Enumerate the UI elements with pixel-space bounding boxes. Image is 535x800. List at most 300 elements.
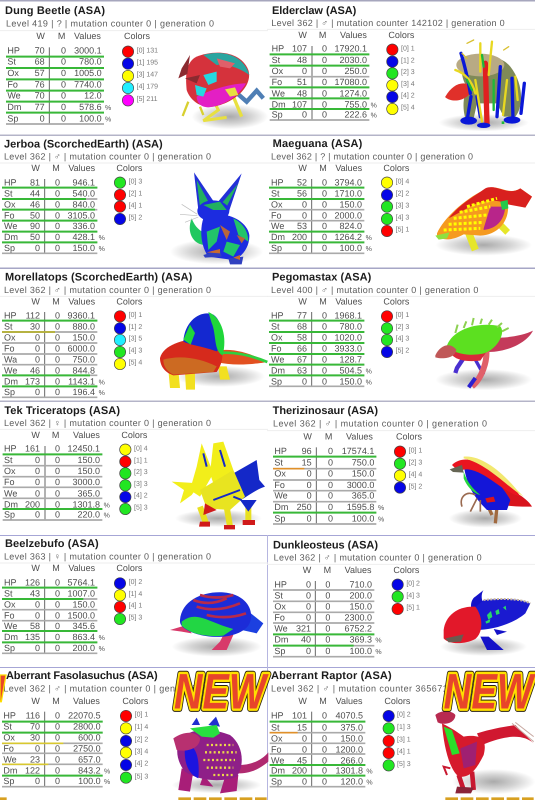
stat table: Values bbox=[346, 431, 373, 441]
stat table: 70 bbox=[35, 45, 45, 55]
stat table: 780.0 bbox=[79, 57, 102, 67]
stat table: 43 bbox=[30, 588, 40, 598]
stat table: Dm bbox=[271, 766, 285, 776]
stat table: 843.2 bbox=[78, 765, 101, 775]
stat table: Fo bbox=[274, 480, 285, 490]
stat table: 150.0 bbox=[340, 733, 363, 743]
colors legend: [4] 3 bbox=[129, 347, 142, 354]
stat table: Fo bbox=[4, 344, 15, 354]
stat table: 0 bbox=[302, 210, 307, 220]
stat table: 3000.0 bbox=[72, 477, 100, 487]
stat table: 0 bbox=[55, 365, 60, 375]
stat table: 0 bbox=[35, 333, 40, 343]
stat table: 0 bbox=[306, 602, 311, 612]
stat table: % bbox=[366, 367, 372, 375]
colors legend: [0] 2 bbox=[406, 579, 420, 587]
stat table: 0 bbox=[328, 480, 333, 490]
stat table: 0 bbox=[325, 613, 330, 623]
colors legend: [5] 211 bbox=[137, 95, 158, 103]
stat table: St bbox=[271, 188, 280, 198]
title: Beelzebufo (ASA) bbox=[5, 537, 99, 549]
stat table: Sp bbox=[4, 510, 15, 520]
colors legend: Colors bbox=[383, 163, 409, 173]
stat table: 0 bbox=[55, 177, 60, 187]
stat table: Ox bbox=[4, 599, 16, 609]
stat table: 3933.0 bbox=[334, 344, 362, 354]
stat table: 90 bbox=[30, 221, 40, 231]
stat table: 51 bbox=[297, 77, 307, 87]
stat table: 0 bbox=[55, 776, 60, 786]
subtitle: Level 362 | ♂ | mutation counter 0 | generation 0 bbox=[274, 553, 482, 563]
stat table: M bbox=[324, 565, 331, 575]
stat table: 0 bbox=[322, 199, 327, 209]
stat table: 0 bbox=[55, 243, 60, 253]
stat table: Sp bbox=[272, 110, 283, 120]
stat table: 0 bbox=[322, 99, 327, 109]
stat table: Ox bbox=[4, 199, 16, 209]
stat table: 0 bbox=[325, 591, 330, 601]
stat table: 0 bbox=[322, 88, 327, 98]
stat table: 844.8 bbox=[72, 365, 95, 375]
colors legend: [5] 3 bbox=[397, 760, 411, 768]
stat table: 0 bbox=[55, 588, 60, 598]
stat table: 120.0 bbox=[340, 776, 363, 786]
colors legend: [1] 3 bbox=[397, 723, 411, 731]
stat table: 81 bbox=[30, 177, 40, 187]
stat table: 0 bbox=[322, 744, 327, 754]
stat table: Dm bbox=[7, 102, 21, 112]
stat table bbox=[0, 563, 268, 653]
stat table: 77 bbox=[35, 102, 45, 112]
stat table: 76 bbox=[35, 79, 45, 89]
stat table: Fo bbox=[4, 610, 15, 620]
stat table: W bbox=[298, 163, 307, 173]
stat table: 824.0 bbox=[339, 221, 362, 231]
stat table: 200.0 bbox=[349, 591, 372, 601]
stat table: 17080.0 bbox=[334, 77, 367, 87]
stat table: Sp bbox=[271, 243, 282, 253]
stat table: 0 bbox=[35, 744, 40, 754]
creature: elderclaw bbox=[439, 40, 529, 131]
colors legend bbox=[114, 296, 142, 370]
title: Jerboa (ScorchedEarth) (ASA) bbox=[4, 137, 163, 150]
stat table: 0 bbox=[322, 376, 327, 386]
stat table: 5764.1 bbox=[67, 577, 95, 587]
stat table: 0 bbox=[322, 210, 327, 220]
stat table: W bbox=[36, 31, 45, 41]
stat table: 50 bbox=[30, 232, 40, 242]
subtitle: Level 363 | ♀ | mutation counter 0 | generation 0 bbox=[4, 551, 211, 561]
panel: Dung Beetle bbox=[0, 4, 268, 129]
stat table: 1143.1 bbox=[68, 376, 95, 386]
stat table: 0 bbox=[322, 44, 327, 54]
stat table: 336.0 bbox=[72, 221, 95, 231]
stat table: 22070.5 bbox=[68, 711, 101, 721]
stat table: 200.0 bbox=[72, 643, 95, 653]
stat table: 70 bbox=[30, 722, 40, 732]
stat table: 0 bbox=[55, 387, 60, 397]
stat table: 150.0 bbox=[72, 599, 95, 609]
creature: therizinosaur bbox=[449, 457, 532, 528]
stat table: 0 bbox=[306, 591, 311, 601]
stat table: 122 bbox=[25, 765, 40, 775]
stat table: We bbox=[271, 755, 284, 765]
stat table: M bbox=[319, 696, 327, 706]
stat table: % bbox=[99, 245, 105, 253]
title: Dung Beetle (ASA) bbox=[5, 4, 105, 16]
stat table: 0 bbox=[55, 210, 60, 220]
stat table: 15 bbox=[297, 722, 307, 732]
stat table: 0 bbox=[35, 488, 40, 498]
stat table: 0 bbox=[306, 646, 311, 656]
stat table: 0 bbox=[55, 599, 60, 609]
title: Aberrant Fasolasuchus (ASA) bbox=[6, 669, 158, 681]
stat table: 150.0 bbox=[349, 602, 372, 612]
stat table: Values bbox=[345, 565, 372, 575]
stat table: Sp bbox=[271, 776, 282, 786]
creature: tek triceratops bbox=[172, 442, 265, 529]
panel: Dunkleosteus bbox=[267, 538, 535, 657]
stat table: 4070.5 bbox=[335, 711, 363, 721]
stat table: Fo bbox=[274, 613, 285, 623]
stat table: 30 bbox=[30, 322, 40, 332]
stat table: 0 bbox=[35, 455, 40, 465]
subtitle: Level 400 | ♂ | mutation counter 0 | generation 0 bbox=[271, 285, 478, 295]
stat table: Dm bbox=[272, 99, 286, 109]
panel: Beelzebufo bbox=[0, 537, 268, 657]
stat table: 135 bbox=[25, 632, 40, 642]
colors legend: [4] 2 bbox=[134, 492, 148, 499]
colors legend: Colors bbox=[116, 563, 142, 573]
stat table: 0 bbox=[307, 480, 312, 490]
stat table: 3000.0 bbox=[347, 480, 374, 490]
colors legend: [2] 3 bbox=[409, 458, 422, 466]
stat table: 250 bbox=[297, 502, 312, 512]
stat table: % bbox=[375, 637, 382, 644]
stat table: We bbox=[272, 88, 285, 98]
stat table: 710.0 bbox=[349, 580, 372, 590]
stat table bbox=[267, 163, 535, 253]
stat table: 0 bbox=[55, 621, 60, 631]
stat table: 1301.8 bbox=[72, 499, 100, 509]
stat table: W bbox=[298, 297, 307, 307]
creature: dunkleosteus bbox=[440, 590, 530, 656]
stat table bbox=[267, 431, 535, 524]
stat table: 0 bbox=[322, 55, 327, 65]
stat table: 0 bbox=[55, 510, 60, 520]
colors legend: [5] 1 bbox=[406, 604, 420, 611]
stat table: 840.0 bbox=[72, 199, 95, 209]
colors legend bbox=[394, 431, 422, 493]
stat table: 1274.0 bbox=[339, 88, 367, 98]
stat table: Ox bbox=[3, 733, 15, 743]
stat table: 750.0 bbox=[72, 355, 95, 365]
stat table: 0 bbox=[325, 602, 330, 612]
colors legend: [4] 3 bbox=[406, 591, 420, 599]
stat table: % bbox=[99, 634, 105, 642]
colors legend bbox=[387, 30, 415, 115]
stat table: 250.0 bbox=[344, 66, 367, 76]
stat table: We bbox=[271, 221, 284, 231]
colors legend bbox=[114, 163, 142, 225]
colors legend: [3] 4 bbox=[401, 80, 415, 88]
colors legend: [1] 4 bbox=[129, 590, 142, 598]
stat table: We bbox=[271, 355, 284, 365]
stat table: 46 bbox=[30, 365, 40, 375]
colors legend: [5] 2 bbox=[396, 347, 409, 354]
stat table: 0 bbox=[61, 102, 66, 112]
stat table: % bbox=[99, 378, 105, 386]
stat table: 100.0 bbox=[349, 646, 372, 656]
stat table: M bbox=[52, 563, 60, 573]
stat table: St bbox=[4, 188, 13, 198]
stat table: Fo bbox=[7, 79, 18, 89]
stat table: Dm bbox=[4, 376, 18, 386]
subtitle: Level 362 | ? | mutation counter 0 | generation 0 bbox=[271, 151, 473, 161]
subtitle: Level 362 | ♂ | mutation counter 0 | generation 0 bbox=[4, 285, 211, 295]
colors legend: [3] 3 bbox=[134, 480, 148, 488]
panel: Aberrant Raptor bbox=[270, 663, 535, 799]
stat table: Ox bbox=[4, 466, 16, 476]
stat table: 0 bbox=[322, 755, 327, 765]
stat table: HP bbox=[274, 580, 287, 590]
colors legend: [1] 195 bbox=[137, 58, 158, 66]
stat table: % bbox=[378, 515, 384, 523]
stat table: St bbox=[4, 455, 13, 465]
stat table: 0 bbox=[40, 113, 45, 123]
colors legend: [2] 2 bbox=[135, 736, 148, 743]
stat table: 750.0 bbox=[352, 457, 374, 467]
subtitle: Level 362 | ♂ | mutation counter 365671 bbox=[271, 684, 448, 694]
colors legend: [5] 2 bbox=[409, 482, 422, 490]
stat table: 1301.8 bbox=[335, 766, 363, 776]
stat table: 0 bbox=[55, 722, 60, 732]
stat table: Fo bbox=[272, 77, 282, 87]
colors legend: [5] 2 bbox=[129, 214, 142, 221]
stat table: Ox bbox=[272, 66, 283, 76]
stat table: 0 bbox=[325, 580, 330, 590]
stat table: Dm bbox=[271, 365, 285, 375]
colors legend: [4] 3 bbox=[396, 214, 409, 221]
stat table: 48 bbox=[297, 88, 307, 98]
stat table: 0 bbox=[325, 624, 330, 634]
stat table: M bbox=[319, 163, 327, 173]
subtitle: Level 362 | ♂ | mutation counter 0 | generation 0 bbox=[273, 419, 487, 429]
stat table: 2300.0 bbox=[344, 613, 372, 623]
stat table: Ox bbox=[4, 333, 16, 343]
stat table: 0 bbox=[61, 68, 66, 78]
creature: beelzebufo bbox=[170, 592, 263, 657]
stat table: Dm bbox=[271, 232, 285, 242]
stat table: 0 bbox=[307, 491, 312, 501]
stat table: 0 bbox=[328, 513, 333, 523]
stat table: 0 bbox=[35, 599, 40, 609]
stat table: We bbox=[274, 491, 288, 501]
stat table: 0 bbox=[55, 455, 60, 465]
stat table: Ox bbox=[271, 199, 283, 209]
stat table: HP bbox=[271, 711, 284, 721]
badge: NEW: NEW bbox=[174, 663, 269, 719]
stat table: 0 bbox=[35, 510, 40, 520]
stat table: 7740.0 bbox=[74, 79, 102, 89]
stat table: 504.5 bbox=[339, 365, 362, 375]
stat table: St bbox=[271, 722, 280, 732]
stat table: 0 bbox=[55, 477, 60, 487]
stat table: HP bbox=[3, 711, 16, 721]
stat table bbox=[0, 163, 268, 253]
colors legend: [0] 1 bbox=[409, 446, 422, 454]
subtitle: Level 362 | ♀ | mutation counter 0 | generation 0 bbox=[4, 418, 211, 428]
creature: aberrant raptor bbox=[435, 711, 535, 794]
stat table: 100.0 bbox=[352, 513, 374, 523]
stat table: Ox bbox=[274, 602, 286, 612]
stat table: 755.0 bbox=[344, 99, 367, 109]
stat table: 48 bbox=[297, 55, 307, 65]
stat table: 1968.1 bbox=[334, 311, 362, 321]
stat table: 0 bbox=[322, 322, 327, 332]
colors legend: Colors bbox=[121, 430, 147, 440]
stat table: % bbox=[366, 378, 372, 386]
stat table bbox=[267, 564, 535, 657]
stat table: We bbox=[4, 621, 17, 631]
stat table: 107 bbox=[292, 44, 307, 54]
stat table: 0 bbox=[302, 66, 307, 76]
stat table: Fo bbox=[271, 744, 282, 754]
stat table: % bbox=[366, 768, 373, 775]
stat table: 0 bbox=[302, 744, 307, 754]
stat table: 0 bbox=[55, 188, 60, 198]
stat table: 161 bbox=[25, 444, 40, 454]
stat table: 0 bbox=[55, 643, 60, 653]
stat table: Sp bbox=[7, 113, 18, 123]
stat table: 126 bbox=[25, 577, 40, 587]
panel: Pegomastax bbox=[267, 271, 535, 390]
panel: Aberrant Fasolasuchus bbox=[0, 663, 269, 799]
stat table: % bbox=[104, 767, 110, 775]
stat table: 200 bbox=[25, 499, 40, 509]
colors legend: [3] 4 bbox=[135, 747, 148, 755]
colors legend: [4] 1 bbox=[397, 748, 411, 755]
stat table: Fo bbox=[271, 210, 282, 220]
stat table: 345.6 bbox=[72, 621, 95, 631]
stat table: 70 bbox=[35, 91, 45, 101]
stat table bbox=[0, 429, 268, 520]
stat table: HP bbox=[4, 177, 17, 187]
stat table: % bbox=[105, 115, 111, 123]
colors legend: [5] 3 bbox=[134, 504, 148, 511]
stat table: 0 bbox=[35, 610, 40, 620]
stat table: 45 bbox=[297, 755, 307, 765]
stat table: Dm bbox=[274, 502, 288, 512]
stat table: We bbox=[7, 91, 21, 101]
stat table: 0 bbox=[322, 333, 327, 343]
stat table: % bbox=[366, 234, 372, 242]
stat table: % bbox=[99, 389, 105, 397]
stat table: We bbox=[4, 365, 17, 375]
colors legend: [2] 3 bbox=[134, 468, 148, 476]
colors legend: [4] 2 bbox=[135, 760, 148, 767]
stat table: % bbox=[105, 104, 111, 112]
subtitle: Level 362 | ♂ | mutation counter 0 | generation 0 bbox=[3, 684, 213, 694]
panel: Morellatops bbox=[0, 271, 268, 397]
stat table: 369.3 bbox=[349, 635, 372, 645]
stat table: 2750.0 bbox=[73, 744, 101, 754]
stat table: % bbox=[371, 112, 377, 119]
stat table: 23 bbox=[30, 755, 40, 765]
stat table: Sp bbox=[4, 243, 15, 253]
stat table: W bbox=[303, 431, 312, 441]
stat table: 780.0 bbox=[339, 322, 362, 332]
stat table: Values bbox=[335, 163, 362, 173]
stat table: 3794.0 bbox=[334, 177, 362, 187]
stat table: Dm bbox=[4, 232, 18, 242]
panel: Jerboa bbox=[0, 137, 268, 264]
colors legend: [5] 4 bbox=[129, 359, 142, 366]
stat table: M bbox=[52, 430, 59, 440]
stat table: 0 bbox=[55, 488, 60, 498]
stat table: 30 bbox=[30, 733, 40, 743]
colors legend bbox=[383, 696, 411, 771]
stat table: % bbox=[99, 645, 105, 653]
colors legend: [5] 4 bbox=[401, 104, 415, 111]
colors legend: [0] 4 bbox=[134, 444, 148, 452]
stat table: Fo bbox=[271, 344, 282, 354]
stat table: 150.0 bbox=[339, 199, 362, 209]
stat table: 0 bbox=[55, 577, 60, 587]
colors legend: Colors bbox=[393, 565, 419, 575]
stat table: 52 bbox=[297, 177, 307, 187]
stat table: Values bbox=[335, 297, 362, 307]
stat table: 0 bbox=[328, 457, 333, 467]
creature: morellatops bbox=[160, 312, 267, 390]
colors legend: [3] 147 bbox=[137, 71, 158, 78]
subtitle: Level 362 | ♂ | mutation counter 142102 | generation 0 bbox=[271, 18, 505, 28]
colors legend: [0] 1 bbox=[129, 311, 142, 319]
colors legend bbox=[114, 563, 142, 625]
title: Dunkleosteus (ASA) bbox=[273, 538, 378, 551]
stat table: 946.1 bbox=[72, 177, 95, 187]
stat table: 0 bbox=[61, 79, 66, 89]
colors legend: [1] 1 bbox=[134, 456, 148, 464]
stat table: 196.4 bbox=[72, 387, 95, 397]
stat table: 0 bbox=[302, 733, 307, 743]
stat table: 150.0 bbox=[72, 333, 95, 343]
stat table: 0 bbox=[302, 376, 307, 386]
colors legend: [4] 1 bbox=[129, 602, 142, 609]
stat table: 0 bbox=[322, 733, 327, 743]
stat table: Values bbox=[340, 30, 367, 40]
title: Tek Triceratops (ASA) bbox=[4, 404, 120, 416]
stat table: 0 bbox=[35, 387, 40, 397]
stat table: % bbox=[371, 101, 377, 109]
stat table: 0 bbox=[55, 221, 60, 231]
stat table: 150.0 bbox=[77, 455, 100, 465]
stat table: 0 bbox=[302, 199, 307, 209]
stat table: % bbox=[104, 501, 110, 509]
stat table: M bbox=[52, 163, 60, 173]
title: Therizinosaur (ASA) bbox=[273, 404, 378, 416]
stat table: 0 bbox=[55, 733, 60, 743]
stat table: 0 bbox=[55, 199, 60, 209]
stat table: % bbox=[366, 778, 373, 786]
stat table: 100.0 bbox=[339, 243, 362, 253]
stat table: Dm bbox=[274, 635, 288, 645]
stat table: 0 bbox=[322, 177, 327, 187]
stat table: 0 bbox=[325, 646, 330, 656]
stat table: 657.0 bbox=[78, 755, 101, 765]
stat table: Values bbox=[68, 563, 95, 573]
title: Pegomastax (ASA) bbox=[272, 271, 371, 283]
